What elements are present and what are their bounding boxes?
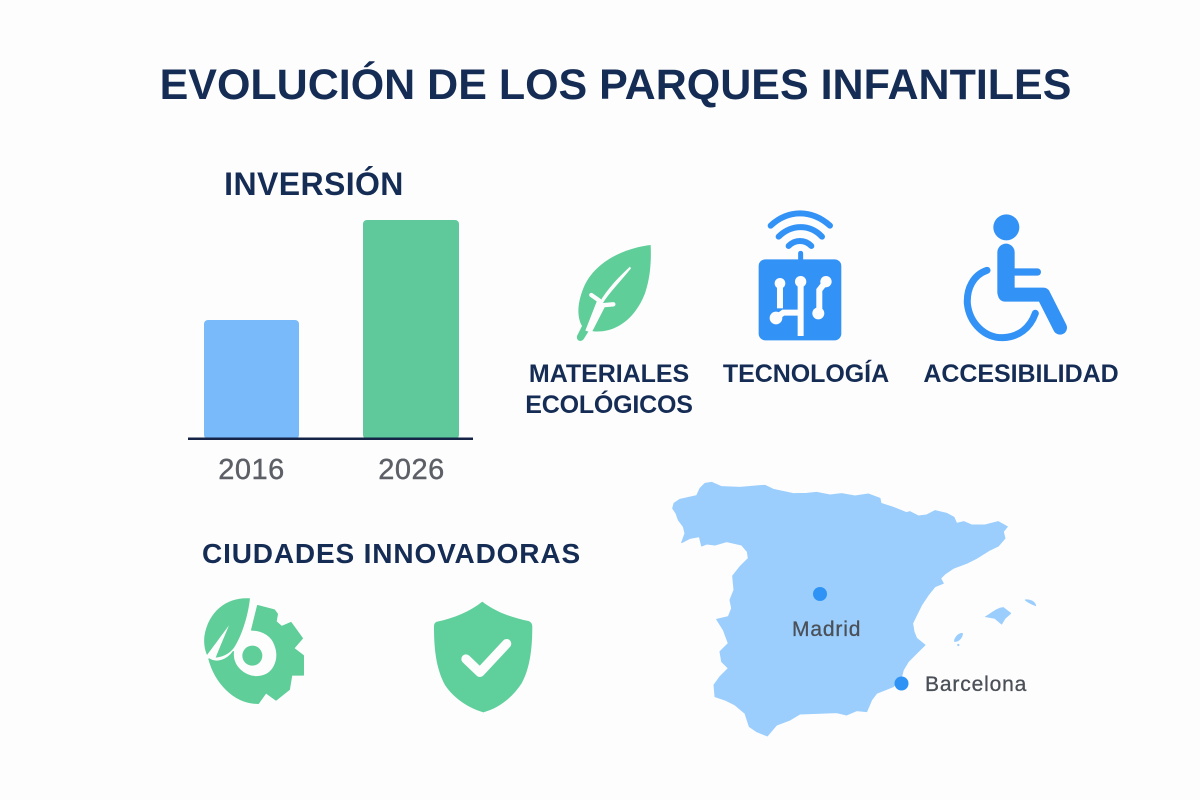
label: Barcelona: Barcelona [925,673,1027,696]
icon: wheelchair accessibility [967,214,1060,338]
bar 2016 [204,320,299,439]
panel: inversión bar chart [188,166,473,486]
label: materiales ecológicos: ECOLÓGICOS [525,389,693,419]
icon: shield with check [434,602,532,712]
heading: inversión: INVERSIÓN [224,166,404,202]
label: tecnología: TECNOLOGÍA [723,359,889,388]
label: accesibilidad: ACCESIBILIDAD [923,360,1119,388]
label: Madrid: Madrid [792,618,861,641]
icon: leaf [577,245,651,341]
bar 2026 [363,220,459,439]
title: EVOLUCIÓN DE LOS PARQUES INFANTILES [160,60,1071,109]
icon: technology chip with wifi [759,213,841,340]
marker: Madrid [813,587,827,601]
map: Spain [673,482,1036,736]
label: materiales ecológicos: MATERIALES [529,360,689,388]
marker: Barcelona [894,676,908,690]
label 2016: 2016 [218,454,285,486]
chart axis [188,438,473,440]
label 2026: 2026 [378,454,445,486]
icon: leaf and gear [204,598,303,703]
heading: ciudades innovadoras: CIUDADES INNOVADORAS [202,538,581,569]
